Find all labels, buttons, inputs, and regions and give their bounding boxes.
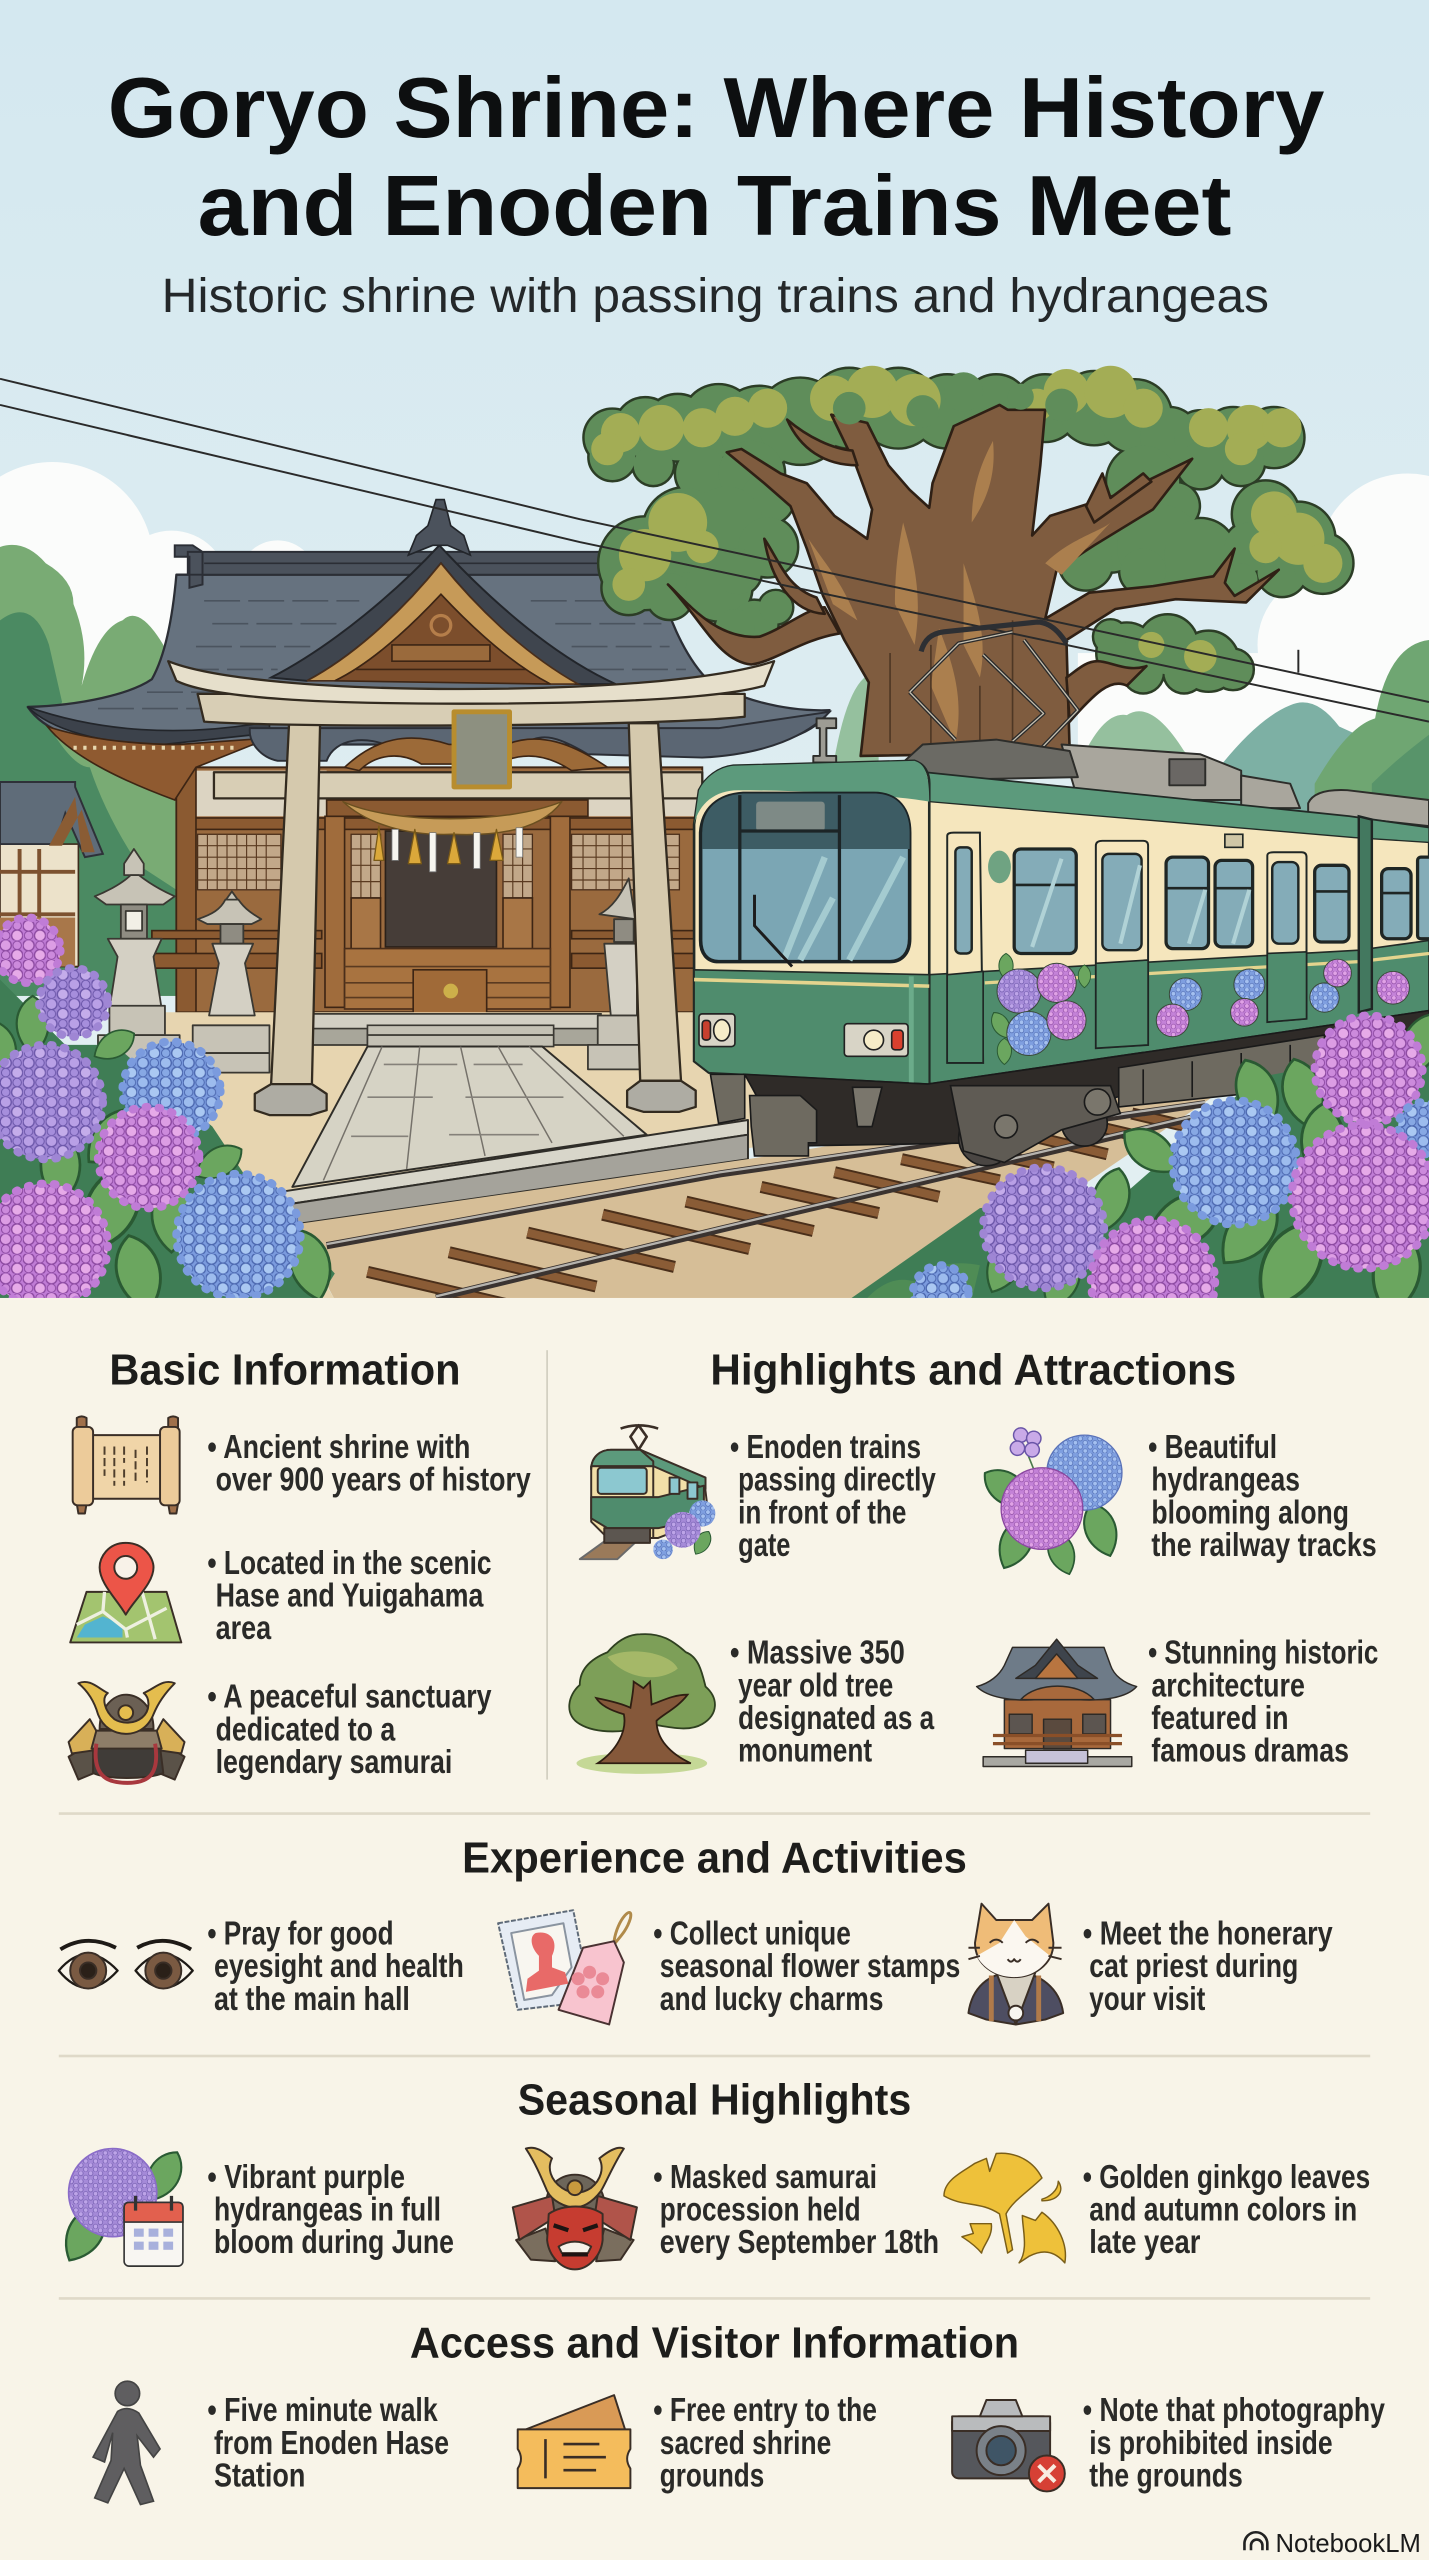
icon: hydrangeas [976,1428,1124,1578]
text: massive tree: year old tree [738,1667,893,1704]
text: architecture: famous dramas [1151,1733,1349,1770]
icon: scroll [73,1416,180,1513]
heading: Highlights and Attractions [710,1346,1236,1394]
plaque [454,712,510,787]
heading: Basic Information [109,1346,461,1394]
small building at left [0,782,103,967]
right hydrangea bushes [849,1008,1429,1344]
text: samurai procession: every September 18th [660,2224,939,2261]
text: enoden trains: gate [738,1527,790,1564]
text: stamps: • Collect unique [653,1915,851,1952]
sky [0,0,1429,1300]
section: Basic Information [69,1346,531,1783]
text: cat [1083,1915,1333,2018]
pantograph [910,622,1078,749]
text: enoden trains [730,1429,936,1564]
heading: Access and Visitor Information [410,2320,1019,2368]
doorway [385,831,496,947]
Enoden train [694,622,1429,1166]
icon: ginkgo leaves [944,2153,1065,2263]
hall walls [176,767,702,1012]
stone lanterns [95,849,640,1073]
text: stamps [653,1915,960,2018]
icon: stamp and charm [498,1910,631,2024]
text: photography: the grounds [1089,2458,1243,2495]
icon: samurai helmet [69,1682,185,1783]
text: stamps: and lucky charms [660,1981,884,2018]
text: location: • Located in the scenic [207,1545,492,1582]
text: sanctuary: dedicated to a [216,1711,396,1748]
icon: eyes [59,1941,193,1989]
title [108,60,1325,254]
text: architecture: architecture [1151,1667,1305,1704]
text: ginkgo: and autumn colors in [1089,2191,1357,2228]
overhead wires [0,379,1429,722]
icon: shrine [977,1639,1137,1767]
text: ancient shrine: over 900 years of history [216,1462,531,1499]
text: walk [207,2392,449,2495]
text: photography: is prohibited inside [1089,2425,1333,2462]
text: pray: at the main hall [214,1981,410,2018]
undercarriage and bogies [710,1011,1429,1166]
clouds [0,462,1429,776]
icon: samurai mask [513,2148,637,2269]
icon: map pin [70,1543,181,1642]
text: cat: cat priest during [1089,1948,1298,1985]
lattice panels [198,834,679,898]
text: cat: • Meet the honerary [1083,1915,1333,1952]
section: Access and Visitor Information [93,2320,1385,2504]
ground [163,1012,784,1300]
text: samurai procession: procession held [660,2191,861,2228]
text: beautiful hydrangeas [1148,1429,1377,1564]
side doors and windows [947,816,1429,1063]
icon: walking person [93,2381,160,2504]
text: pray [207,1915,464,2018]
torii gate [168,661,774,1115]
text: samurai procession [653,2159,939,2261]
roof units [813,718,1429,826]
steps and offering box [345,949,550,1009]
text: architecture: featured in [1151,1700,1289,1737]
text: photography [1083,2392,1385,2495]
section: Highlights and Attractions [569,1346,1378,1774]
text: purple hydrangeas: • Vibrant purple [207,2159,405,2196]
text: walk: • Five minute walk [207,2392,438,2429]
icon: hydrangea and calendar [55,2145,190,2269]
pillars [271,723,320,1084]
text: free entry: sacred shrine [660,2425,831,2462]
text: enoden trains: • Enoden trains [730,1429,921,1466]
distant hills and trees [0,545,1429,996]
roof shingle lines [98,601,735,709]
text: ancient shrine: • Ancient shrine with [207,1429,470,1466]
shrine main hall [28,500,830,1016]
roof [28,575,830,745]
giant tree [585,366,1352,756]
text: ancient shrine [207,1429,531,1499]
text: ginkgo: late year [1089,2224,1200,2261]
lower eaves [28,707,269,744]
tie beam [214,772,702,798]
title: and Enoden Trains Meet [198,158,1231,254]
icon: train [580,1425,715,1559]
roof ridge [175,545,629,588]
stone path [281,1047,748,1224]
dark foliage outline layer [585,369,1352,692]
section: Experience and Activities [59,1835,1333,2024]
cream information panel [0,1298,1429,2560]
text: free entry: • Free entry to the [653,2392,877,2429]
text: samurai procession: • Masked samurai [653,2159,877,2196]
trunk highlights [808,441,1111,743]
windshield [701,793,910,962]
text: massive tree: designated as a [738,1700,934,1737]
text: purple hydrangeas [207,2159,454,2261]
text: walk: Station [214,2458,305,2495]
text: enoden trains: passing directly [738,1462,936,1499]
upper lintel [198,694,745,726]
text: architecture [1148,1635,1378,1770]
gable [271,545,616,684]
text: location: Hase and Yuigahama [216,1578,484,1615]
text: free entry: grounds [660,2458,764,2495]
text: free entry [653,2392,877,2495]
plaster upper wall [196,771,702,816]
NotebookLM logo: NotebookLM [1275,2528,1421,2558]
left hydrangea bushes [0,918,338,1317]
headlights [699,1014,908,1056]
row dividers [59,1812,1370,2300]
icon: logo arcs [1244,2532,1267,2550]
text: sanctuary [207,1679,492,1781]
stone platform [312,1014,601,1047]
text: massive tree [730,1635,934,1770]
side of car [923,772,1429,1084]
olive foliage highlights [591,366,1342,673]
section: Seasonal Highlights [55,2076,1370,2269]
text: purple hydrangeas: bloom during June [214,2224,454,2261]
text: beautiful hydrangeas: blooming along [1151,1494,1349,1531]
text: cat: your visit [1089,1981,1205,2018]
title: Goryo Shrine: Where History [108,60,1325,156]
text: location [207,1545,492,1647]
text: enoden trains: in front of the [738,1494,906,1531]
icon: ticket [518,2395,630,2488]
text: sanctuary: • A peaceful sanctuary [207,1679,492,1716]
text: location: area [216,1610,271,1647]
text: beautiful hydrangeas: hydrangeas [1151,1462,1300,1499]
icon: cat priest [968,1904,1063,2024]
text: stamps: seasonal flower stamps [660,1948,960,1985]
text: sanctuary: legendary samurai [216,1744,452,1781]
dark foliage fill layer [585,369,1352,692]
wooden beams [152,767,699,1012]
hero illustration: shrine, tree and train [0,0,1429,1344]
text: massive tree: • Massive 350 [730,1635,905,1672]
railway tracks [294,1078,1241,1306]
text: ginkgo [1083,2159,1370,2261]
sacred rope and paper streamers [343,802,562,872]
text: pray: • Pray for good [207,1915,394,1952]
hydrangea decals on train [987,953,1409,1064]
text: beautiful hydrangeas: • Beautiful [1148,1429,1277,1466]
front foliage fringe [833,372,1078,428]
column divider [546,1350,548,1780]
heading: Seasonal Highlights [518,2076,911,2124]
text: beautiful hydrangeas: the railway tracks [1151,1527,1377,1564]
text: massive tree: monument [738,1733,872,1770]
icon: old tree [569,1634,715,1774]
heading: Experience and Activities [462,1835,967,1883]
text: purple hydrangeas: hydrangeas in full [214,2191,441,2228]
cab front [694,761,929,1084]
subtitle: Historic shrine with passing trains and hydrangeas [162,269,1269,323]
text: walk: from Enoden Hase [214,2425,449,2462]
icon: camera prohibited [952,2400,1065,2491]
text: pray: eyesight and health [214,1948,464,1985]
trunk and branches [668,405,1279,756]
